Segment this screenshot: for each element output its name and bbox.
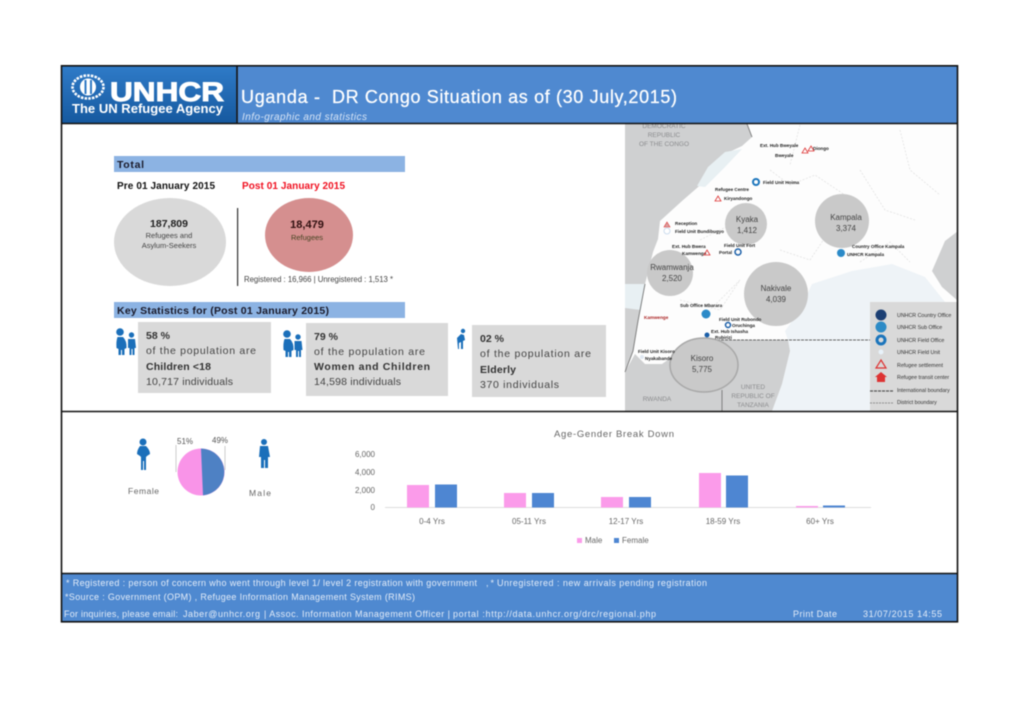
population circle: Kampala (815, 194, 869, 248)
stat card: elderly: Elderly (480, 364, 516, 376)
Total heading (114, 156, 405, 172)
country labels: REPUBLIC (648, 132, 681, 139)
stat card: women and children: 14,598 individuals (314, 376, 401, 388)
country labels: UNITED (741, 384, 765, 391)
map legend: UNHCR Country Office (897, 313, 951, 319)
country labels: DEMOCRATIC (642, 123, 686, 130)
male label: Male (249, 488, 271, 498)
country labels: RWANDA (643, 396, 672, 403)
print date: Print Date (793, 609, 837, 619)
map legend: Refugee transit center (897, 375, 949, 381)
title: Uganda - (241, 87, 320, 107)
frame lines (61, 66, 958, 622)
contact line (64, 609, 656, 619)
pie chart: 49% (212, 436, 228, 445)
footer band (61, 573, 958, 622)
map site labels and markers: Ext. Hub Bweyale (760, 143, 799, 148)
stat card: elderly (472, 325, 606, 397)
map site labels and markers: Sub Office Mbarara (680, 303, 723, 308)
contact line: | Assoc. Information Management Officer | (264, 609, 450, 619)
y axis labels: 4,000 (355, 468, 376, 477)
international boundary (705, 339, 870, 341)
bar chart: age-gender breakdown (355, 429, 871, 545)
UNHCR logo: The UN Refugee Agency (72, 102, 223, 116)
key statistics heading (114, 302, 405, 318)
pre-2015 label: Pre 01 January 2015 (117, 181, 215, 192)
contact line: portal :http://data.unhcr.org/drc/regional.php (453, 609, 656, 619)
map panel (625, 123, 958, 411)
y axis labels: 2,000 (355, 486, 376, 495)
map site labels and markers: Field Unit Rubondo (719, 317, 762, 322)
divider (237, 208, 238, 286)
Total heading: Total (117, 159, 144, 171)
population circle: Kisoro: 5,775 (692, 365, 713, 374)
population circle: Kisoro: Kisoro (691, 354, 714, 363)
female label: Female (128, 486, 159, 496)
stat card: children: Children <18 (146, 361, 211, 373)
registered note: Registered : 16,966 | Unregistered : 1,513 * (244, 275, 393, 284)
stat card: women and children: Women and Children (314, 361, 430, 373)
map site labels and markers: Kiryandongo (724, 196, 753, 201)
icon: male (259, 439, 270, 468)
map site labels and markers: Field Unit Kisoro (638, 349, 675, 354)
icon: elderly person (457, 329, 465, 349)
x axis labels: 60+ Yrs (806, 517, 834, 526)
Lake Victoria (772, 264, 945, 411)
footnote definitions: * Registered : person of concern who went through level 1/ level 2 registration with government (66, 578, 477, 588)
Lake Edward (625, 284, 645, 310)
map site labels and markers: Field Unit Bundibugyo (675, 229, 724, 234)
map legend (870, 302, 958, 411)
map legend: UNHCR Field Office (897, 338, 944, 344)
population circle: Nakivale: 4,039 (766, 295, 787, 304)
chart legend (577, 536, 649, 545)
stat card: children: 10,717 individuals (146, 376, 233, 388)
footnote definitions: , * (486, 578, 494, 588)
population circle: Kisoro (670, 338, 738, 392)
map site labels and markers: Reception (675, 221, 697, 226)
chart title: Age-Gender Break Down (554, 429, 674, 440)
population circle: Rwamwanja (647, 250, 694, 296)
y axis labels: 0 (371, 503, 376, 512)
subtitle: Info-graphic and statistics (242, 112, 367, 123)
map site labels and markers: UNHCR Kampala (847, 252, 884, 257)
stat card: elderly: 370 individuals (480, 379, 559, 391)
Tanzania and Rwanda land (625, 340, 790, 411)
population circle: Kampala: Kampala (830, 213, 862, 222)
footnote definitions: Unregistered : new arrivals pending registration (497, 578, 707, 588)
post-2015 label: Post 01 January 2015 (242, 181, 345, 192)
map site labels and markers: Refugee Centre (715, 187, 749, 192)
country labels (639, 123, 775, 409)
icon: female (137, 438, 150, 470)
key statistics heading: Key Statistics for (Post 01 January 2015) (117, 305, 329, 317)
print timestamp: 31/07/2015 14:55 (863, 609, 942, 619)
pre-2015 bubble: Refugees and (146, 231, 192, 240)
x axis labels: 18-59 Yrs (706, 517, 740, 526)
population circle: Nakivale: Nakivale (761, 284, 792, 293)
stat card: women and children: of the population are (314, 346, 425, 358)
contact line: Jaber@unhcr.org (183, 609, 260, 619)
map site labels and markers: Field Unit Hoima (763, 180, 800, 185)
stat card: children: 58 % (146, 330, 171, 342)
post-2015 bubble (265, 198, 353, 272)
post-2015 bubble: Refugees (291, 233, 323, 242)
population circle: Kyaka: 1,412 (737, 226, 758, 235)
map legend: District boundary (897, 400, 937, 406)
female bars (435, 476, 845, 508)
y axis labels (355, 450, 376, 512)
icon: woman and child (283, 330, 302, 357)
source line: *Source : Government (OPM) , Refugee Information Management System (RIMS) (65, 592, 415, 602)
post-2015 bubble: 18,479 (290, 219, 324, 231)
population circle: Rwamwanja: Rwamwanja (650, 263, 694, 272)
country labels: OF THE CONGO (639, 141, 689, 148)
contact line: For inquiries, please email: (64, 609, 178, 619)
stat card: elderly: of the population are (480, 348, 591, 360)
population circle: Kampala: 3,374 (836, 224, 857, 233)
stat card: women and children (306, 323, 448, 396)
stat card: elderly: 02 % (480, 333, 505, 345)
pre-2015 bubble: Asylum-Seekers (142, 241, 197, 250)
pie chart: 51% (177, 437, 193, 446)
chart legend: Female (622, 536, 649, 545)
stat card: women and children: 79 % (314, 331, 339, 343)
map site labels and markers: Bweyale (775, 153, 794, 158)
map legend: International boundary (897, 388, 950, 394)
x axis labels (419, 517, 834, 526)
stat card: children: of the population are (146, 345, 256, 357)
panel: key statistics (114, 302, 606, 397)
lake Albert (697, 149, 742, 187)
map site labels and markers: Country Office Kampala (852, 244, 905, 249)
title: DR Congo Situation as of (30 July,2015) (332, 87, 677, 107)
stat card: children (138, 322, 271, 393)
UNHCR logo (62, 66, 236, 123)
map site labels and markers: Diongo (813, 146, 829, 151)
x axis labels: 05-11 Yrs (512, 517, 546, 526)
map legend: UNHCR Sub Office (897, 325, 942, 331)
population circle: Kyaka (725, 203, 767, 245)
y axis labels: 6,000 (355, 450, 376, 459)
map site labels and markers: Portal (719, 250, 732, 255)
map legend: Refugee settlement (897, 363, 943, 369)
pre-2015 bubble: 187,809 (150, 218, 188, 230)
pie chart (176, 436, 228, 496)
population circle: Rwamwanja: 2,520 (662, 274, 683, 283)
DRC land (625, 124, 752, 372)
Kenya land (932, 231, 958, 301)
population circle: Nakivale (744, 262, 808, 326)
x axis labels: 12-17 Yrs (609, 517, 643, 526)
country borders and district lines (625, 124, 940, 411)
country labels: TANZANIA (737, 402, 769, 409)
footnote definitions (66, 578, 707, 588)
male bars (407, 473, 818, 508)
country labels: REPUBLIC OF (731, 393, 775, 400)
chart legend: Male (585, 536, 603, 545)
header band (61, 65, 958, 124)
map site labels and markers: Nyakabande (645, 356, 673, 361)
pre-2015 bubble (114, 198, 226, 286)
panel: totals (114, 156, 405, 286)
panel: gender split (128, 436, 271, 498)
map site labels and markers: Oruchinga (732, 323, 755, 328)
UNHCR logo: UNHCR (110, 77, 224, 107)
population circle: Kyaka: Kyaka (736, 215, 759, 224)
map site labels and markers: Kamwenge (682, 251, 707, 256)
map site labels and markers: Kamwenge (644, 315, 669, 320)
map site labels and markers: Rubirizi (715, 335, 732, 340)
icon: woman and child (116, 328, 136, 355)
map site labels and markers: Ext. Hub Ishasha (711, 329, 748, 334)
map legend: UNHCR Field Unit (897, 350, 940, 356)
x axis labels: 0-4 Yrs (419, 517, 445, 526)
map site labels and markers: Field Unit Fort (724, 243, 756, 248)
map site labels and markers: Ext. Hub Bwera (672, 244, 706, 249)
map site labels and markers (638, 143, 905, 361)
